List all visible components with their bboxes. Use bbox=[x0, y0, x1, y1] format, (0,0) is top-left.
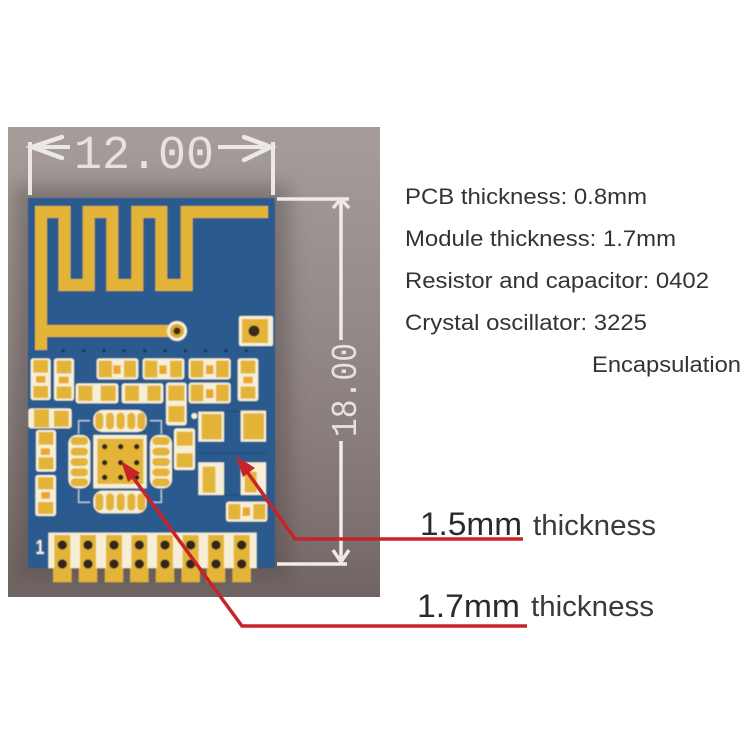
callout arrow: 1.5mm bbox=[236, 456, 523, 539]
QFN chip center pad with vias bbox=[93, 435, 147, 488]
components: lower board in zoom coordinates bbox=[28, 349, 267, 582]
QFN chip outline bbox=[79, 421, 161, 502]
dimension value: 18.00: 18.00 bbox=[326, 343, 367, 437]
antenna trace bbox=[41, 212, 268, 350]
label: 1.5mm thickness: 1.5mm bbox=[420, 506, 522, 542]
label: 1.7mm thickness: 1.7mm bbox=[417, 588, 520, 624]
header pin strip bbox=[48, 533, 257, 582]
crystal oscillator pads bbox=[191, 411, 266, 495]
via: antenna feed bbox=[167, 321, 187, 341]
specifications text block: Encapsulation bbox=[592, 352, 741, 377]
specifications text block bbox=[405, 184, 741, 377]
antenna feed line bbox=[41, 325, 172, 337]
label: 1.7mm thickness bbox=[417, 588, 654, 624]
pin 1 label: 1 bbox=[36, 536, 44, 559]
pad: square via pad bbox=[239, 316, 273, 346]
vertical capacitors bbox=[31, 358, 258, 516]
specifications text block: Crystal oscillator: 3225 bbox=[405, 310, 647, 335]
dimension value: 12.00: 12.00 bbox=[74, 130, 214, 183]
specifications text block: Resistor and capacitor: 0402 bbox=[405, 268, 709, 293]
QFN chip pins bbox=[68, 410, 172, 513]
vias row bbox=[62, 349, 248, 352]
resistors bbox=[28, 383, 195, 470]
horizontal capacitors bbox=[97, 358, 267, 522]
specifications text block: PCB thickness: 0.8mm bbox=[405, 184, 647, 209]
label: 1.5mm thickness: thickness bbox=[533, 510, 656, 542]
panel: PCB module board bbox=[28, 198, 275, 582]
label: 1.5mm thickness bbox=[420, 506, 656, 542]
specifications text block: Module thickness: 1.7mm bbox=[405, 226, 676, 251]
dimension: 12.00 width bbox=[30, 130, 273, 195]
dimension: 18.00 height bbox=[277, 199, 367, 564]
label: 1.7mm thickness: thickness bbox=[531, 591, 654, 623]
callout arrow: 1.7mm bbox=[121, 461, 527, 626]
panel: gray module background bbox=[8, 127, 380, 597]
